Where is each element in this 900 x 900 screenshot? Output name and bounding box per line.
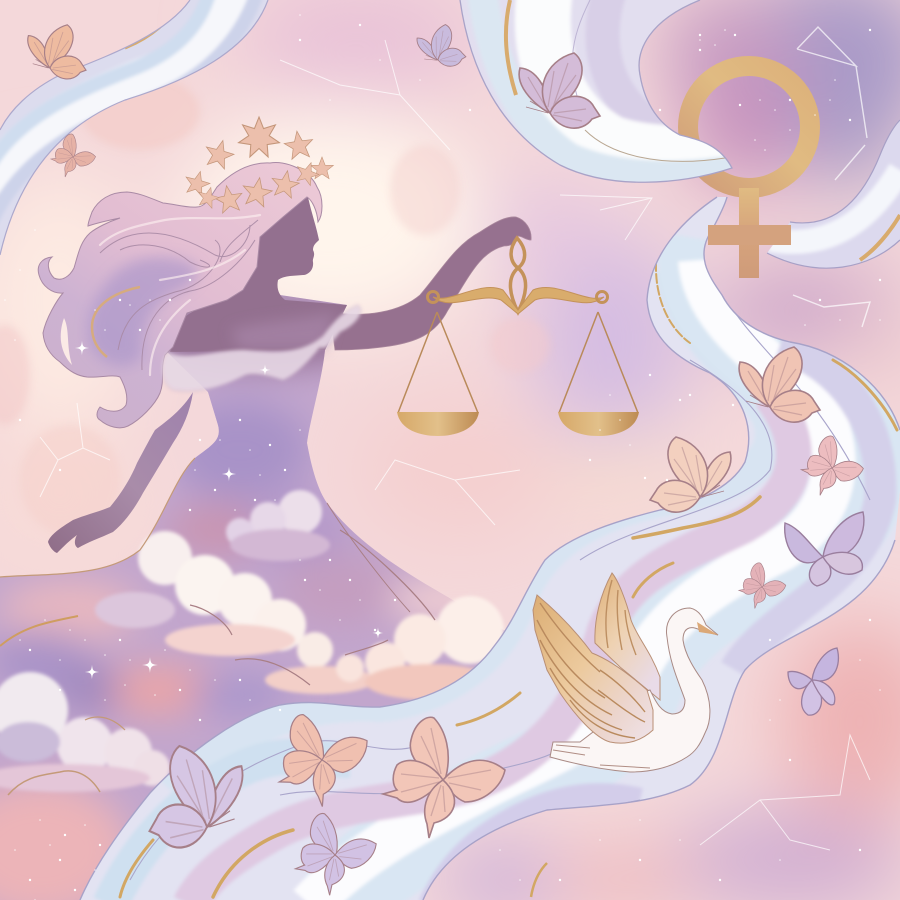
butterfly 13	[383, 717, 505, 838]
left pan	[397, 292, 479, 436]
figure: arm holding the scales	[330, 217, 531, 350]
river: top ribbon into symbol	[459, 0, 733, 183]
swan	[533, 573, 718, 772]
swan body and neck	[550, 608, 718, 772]
butterfly 5	[739, 347, 820, 422]
butterfly 4	[519, 53, 600, 128]
butterfly 3	[415, 22, 467, 71]
swan beak	[697, 622, 718, 635]
figure: shoulder drape	[162, 305, 361, 391]
scale chain and pivot	[510, 238, 526, 312]
lower skirt and starry cloud mass	[0, 280, 540, 900]
river: main flowing ribbon	[60, 180, 900, 900]
figure: head and upper torso	[170, 197, 347, 352]
figure: reaching left arm	[48, 392, 193, 553]
bottom gold accent	[531, 863, 547, 897]
butterfly 6	[650, 437, 731, 512]
right pan	[558, 292, 639, 436]
butterfly 8	[785, 512, 864, 586]
river: top left outline	[0, 0, 268, 255]
butterfly 10	[788, 648, 838, 715]
figure: flowing hair	[38, 162, 322, 428]
swan front wing	[533, 595, 653, 743]
scale beam	[433, 288, 604, 314]
butterfly 12	[265, 701, 380, 815]
butterfly 7	[797, 432, 868, 502]
butterfly 9	[737, 561, 788, 611]
swan rear wing	[595, 573, 660, 700]
symbol of Venus	[688, 66, 810, 278]
butterfly 14	[290, 808, 381, 898]
butterfly 2	[49, 132, 98, 181]
river: right branch	[766, 120, 900, 269]
butterfly 11	[150, 746, 243, 848]
butterfly 1	[28, 25, 86, 79]
clouds around the skirt	[0, 458, 504, 795]
balance scales	[397, 238, 639, 436]
star crown	[182, 117, 333, 214]
river: top left ribbon	[0, 0, 280, 260]
